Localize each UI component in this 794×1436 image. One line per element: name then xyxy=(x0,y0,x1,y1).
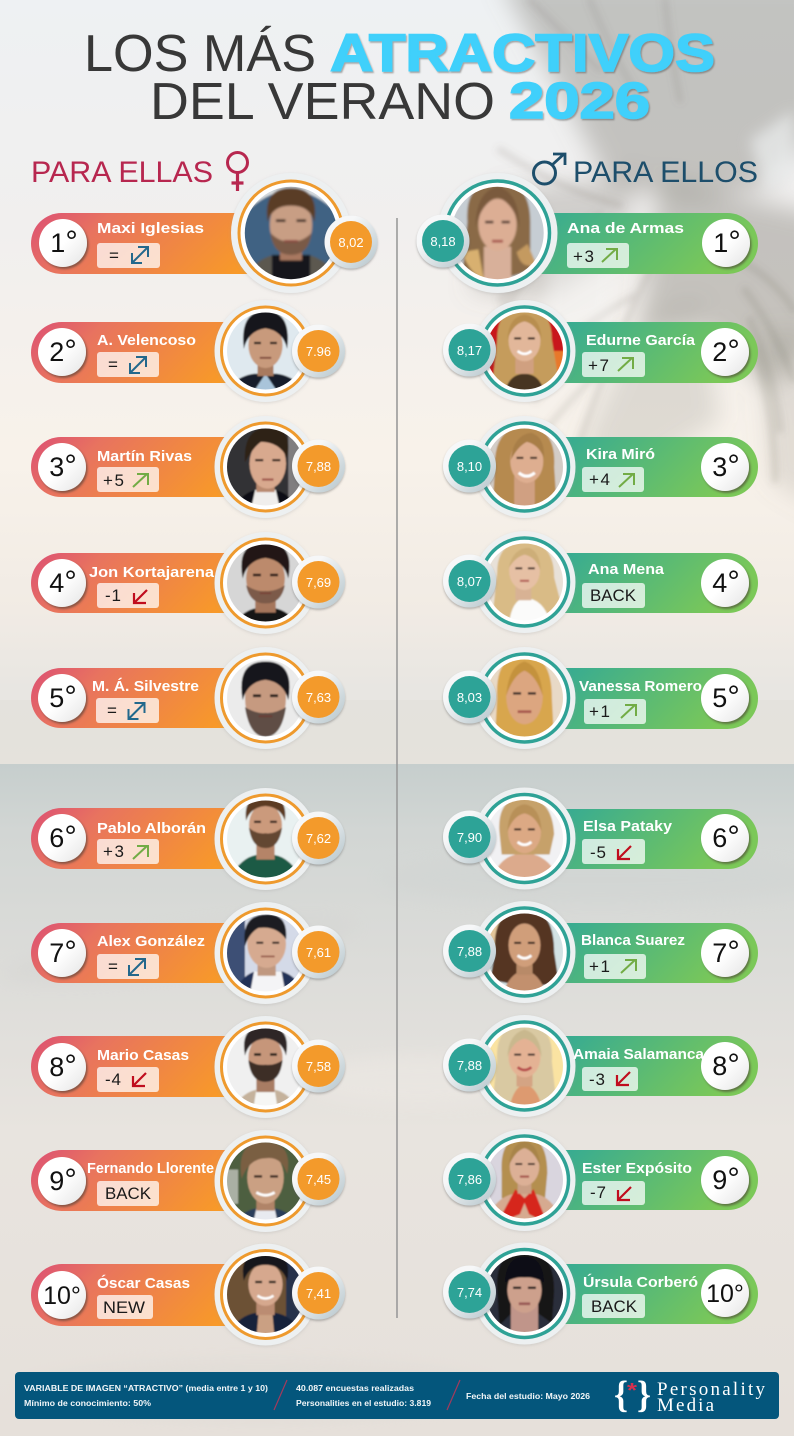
score: 7,88 xyxy=(457,944,482,959)
change badge xyxy=(97,1067,159,1092)
photo frame xyxy=(231,173,351,293)
photo frame xyxy=(214,300,316,402)
photo frame xyxy=(438,173,558,293)
change badge xyxy=(584,954,646,979)
bar xyxy=(31,808,261,869)
change badge xyxy=(97,583,159,608)
rank: 4° xyxy=(712,564,740,599)
ranking row: Blanca Suarez xyxy=(443,901,758,1003)
score xyxy=(443,924,496,978)
ranking row: Maxi Iglesias xyxy=(31,173,378,293)
photo frame xyxy=(214,532,316,634)
score: 7,90 xyxy=(457,830,482,845)
palm tree xyxy=(470,0,794,510)
score: 7,62 xyxy=(306,831,331,846)
bar xyxy=(31,322,261,383)
change badge: BACK xyxy=(590,586,637,605)
rank xyxy=(701,559,749,607)
bar xyxy=(31,1150,261,1211)
ranking row: Vanessa Romero xyxy=(443,647,758,749)
change badge: +5 xyxy=(103,471,124,490)
rank xyxy=(38,1271,86,1319)
photo: Elsa Pataky xyxy=(490,800,563,877)
rank xyxy=(701,1042,749,1090)
photo: Úrsula Corberó xyxy=(479,1248,570,1339)
change badge: -5 xyxy=(590,843,606,862)
ranking row: Amaia Salamanca xyxy=(443,1015,758,1117)
vertical divider xyxy=(396,218,398,1318)
name: Kira Miró xyxy=(586,446,655,463)
score xyxy=(443,324,496,376)
change badge: = xyxy=(107,701,117,720)
score: 8,17 xyxy=(457,343,482,358)
change badge xyxy=(582,1181,645,1205)
photo frame xyxy=(474,901,576,1003)
title xyxy=(84,24,715,131)
title: LOS MÁS xyxy=(84,25,316,83)
change badge: BACK xyxy=(105,1184,152,1203)
rank: 6° xyxy=(712,819,740,854)
change badge: = xyxy=(109,246,119,265)
name: Ana de Armas xyxy=(567,220,684,237)
ranking row: Mario Casas xyxy=(31,1016,345,1118)
rank: 1° xyxy=(50,224,78,259)
study date: Fecha del estudio: Mayo 2026 xyxy=(466,1392,591,1401)
bar xyxy=(31,213,286,274)
photo frame xyxy=(214,1016,316,1118)
rank: 2° xyxy=(49,333,77,368)
logo: Personality Media: { xyxy=(614,1374,628,1416)
ranking row: Edurne García xyxy=(443,300,758,402)
name: Amaia Salamanca xyxy=(573,1046,705,1063)
score xyxy=(292,926,345,978)
score xyxy=(292,812,345,864)
photo frame xyxy=(214,647,316,749)
bar xyxy=(530,1036,758,1096)
photo frame xyxy=(214,788,316,890)
name: Ana Mena xyxy=(588,561,665,578)
rank xyxy=(701,328,749,376)
photo frame xyxy=(474,1129,576,1231)
logo: Personality Media xyxy=(614,1374,766,1416)
name: Alex González xyxy=(97,933,205,950)
rank xyxy=(701,674,749,722)
bar xyxy=(530,1150,758,1210)
rank: 8° xyxy=(712,1047,740,1082)
photo frame xyxy=(474,788,576,890)
photo: Edurne García xyxy=(490,312,563,390)
score: 8,07 xyxy=(457,574,482,589)
photo: Ana Mena xyxy=(490,544,563,618)
change badge: +3 xyxy=(573,247,594,266)
bar xyxy=(500,213,758,274)
score: 7,58 xyxy=(306,1059,331,1074)
rank xyxy=(38,559,86,607)
change badge xyxy=(567,243,629,268)
change badge xyxy=(97,352,159,377)
score xyxy=(416,214,470,268)
rank xyxy=(38,443,86,491)
name: Vanessa Romero xyxy=(579,678,702,695)
photo: Jon Kortajarena xyxy=(227,544,300,622)
bar xyxy=(530,553,758,613)
rank: 6° xyxy=(49,819,77,854)
change badge xyxy=(584,699,646,724)
photo frame xyxy=(214,416,316,518)
score: 7.96 xyxy=(306,344,331,359)
score: 7,61 xyxy=(306,945,331,960)
score: 7,45 xyxy=(306,1172,331,1187)
rank xyxy=(39,219,87,267)
bar xyxy=(530,322,758,383)
change badge: -3 xyxy=(589,1070,605,1089)
change badge: +3 xyxy=(103,842,124,861)
ranking row: Óscar Casas xyxy=(31,1244,345,1346)
photo: Pablo Alborán xyxy=(227,800,300,878)
rank xyxy=(38,929,86,977)
change badge: -4 xyxy=(105,1070,121,1089)
score: 7,41 xyxy=(306,1286,331,1301)
change badge: NEW xyxy=(103,1298,145,1317)
photo: Fernando Llorente xyxy=(227,1142,300,1220)
title: 2026 xyxy=(509,72,650,129)
ranking row: A. Velencoso xyxy=(31,300,345,402)
rank xyxy=(702,219,750,267)
rank xyxy=(38,674,86,722)
change badge xyxy=(582,1067,638,1091)
rank: 10° xyxy=(43,1282,81,1310)
title: DEL VERANO xyxy=(150,73,495,131)
photo: Martín Rivas xyxy=(227,428,300,506)
rank: 5° xyxy=(712,679,740,714)
photo frame xyxy=(474,300,576,402)
score xyxy=(443,440,496,492)
name: Mario Casas xyxy=(97,1047,189,1064)
ranking row: Martín Rivas xyxy=(31,416,345,518)
survey figures: Personalities en el estudio: 3.819 xyxy=(296,1399,432,1408)
ranking row: M. Á. Silvestre xyxy=(31,647,345,749)
score xyxy=(443,1038,496,1092)
score xyxy=(443,810,496,864)
name: Blanca Suarez xyxy=(581,932,685,949)
score xyxy=(324,216,378,268)
name: Fernando Llorente xyxy=(87,1160,214,1177)
rank: 3° xyxy=(712,448,740,483)
name: Úrsula Corberó xyxy=(583,1273,698,1291)
heading: para ellas: PARA ELLAS xyxy=(31,156,213,189)
score: 7,88 xyxy=(306,459,331,474)
change badge: = xyxy=(108,355,118,374)
rank xyxy=(701,443,749,491)
score: 7,69 xyxy=(306,575,331,590)
bar xyxy=(31,668,261,728)
bar xyxy=(31,553,261,613)
footer panel xyxy=(15,1372,779,1419)
name: Maxi Iglesias xyxy=(97,220,204,237)
score xyxy=(292,1152,345,1206)
score: 8,03 xyxy=(457,690,482,705)
score xyxy=(443,670,496,724)
ranking row: Úrsula Corberó xyxy=(443,1242,758,1344)
name: Edurne García xyxy=(586,332,696,349)
name: A. Velencoso xyxy=(97,332,196,349)
change badge xyxy=(582,352,645,377)
ranking row: Ester Expósito xyxy=(443,1129,758,1231)
bar xyxy=(31,1264,261,1326)
ranking row: Kira Miró xyxy=(443,416,758,518)
rank: 2° xyxy=(712,333,740,368)
logo: Personality Media: Personality xyxy=(657,1379,766,1400)
rank xyxy=(38,1157,86,1205)
change badge: +1 xyxy=(589,957,610,976)
rank xyxy=(38,814,86,862)
rank: 7° xyxy=(49,934,77,969)
photo: Ester Expósito xyxy=(479,1134,570,1226)
photo: Maxi Iglesias xyxy=(244,186,336,280)
score xyxy=(292,324,345,378)
photo frame xyxy=(214,1244,316,1346)
ranking row: Fernando Llorente xyxy=(31,1130,345,1232)
rank: 10° xyxy=(706,1280,744,1308)
rank: 1° xyxy=(713,224,741,259)
photo frame xyxy=(474,1242,576,1344)
name: Elsa Pataky xyxy=(583,818,673,835)
ranking row: Ana Mena xyxy=(443,531,758,633)
change badge xyxy=(97,839,159,864)
photo frame xyxy=(214,1130,316,1232)
photo: M. A. Silvestre xyxy=(227,660,300,736)
change badge xyxy=(97,243,160,268)
ranking row: Ana de Armas xyxy=(416,173,758,293)
photo: Blanca Suarez xyxy=(490,914,563,990)
rank: 7° xyxy=(712,934,740,969)
score xyxy=(443,1266,496,1318)
photo frame xyxy=(474,531,576,633)
photo: Mario Casas xyxy=(227,1028,300,1106)
change badge: BACK xyxy=(591,1297,638,1316)
heading: para ellos: PARA ELLOS xyxy=(573,156,758,189)
bar xyxy=(530,809,758,869)
rank: 3° xyxy=(49,448,77,483)
photo: Amaia Salamanca xyxy=(490,1028,563,1104)
change badge xyxy=(582,839,645,864)
score xyxy=(292,670,345,724)
rank: 4° xyxy=(49,564,77,599)
change badge: -7 xyxy=(590,1183,606,1202)
bar xyxy=(530,437,758,497)
rank: 9° xyxy=(712,1161,740,1196)
score: 7,63 xyxy=(306,690,331,705)
logo: Personality Media: Media xyxy=(657,1395,715,1416)
bar xyxy=(31,923,261,983)
score: 7,86 xyxy=(457,1172,482,1187)
rank xyxy=(701,929,749,977)
score xyxy=(292,440,345,492)
change badge: -1 xyxy=(105,586,121,605)
bar xyxy=(31,1036,261,1097)
change badge: +7 xyxy=(588,356,609,375)
name: Óscar Casas xyxy=(97,1274,190,1292)
change badge xyxy=(97,1295,153,1319)
score: 8,10 xyxy=(457,459,482,474)
change badge: +4 xyxy=(589,470,610,489)
study variable note: Mínimo de conocimiento: 50% xyxy=(24,1399,151,1408)
rank xyxy=(701,1156,749,1204)
change badge: +1 xyxy=(589,702,610,721)
score: 8,02 xyxy=(338,235,364,250)
change badge xyxy=(97,954,159,979)
photo frame xyxy=(474,647,576,749)
survey figures: 40.087 encuestas realizadas xyxy=(296,1384,415,1393)
change badge xyxy=(582,467,644,492)
title: ATRACTIVOS xyxy=(330,24,715,83)
ranking row: Elsa Pataky xyxy=(443,788,758,890)
photo: Vanessa Romero xyxy=(490,660,563,736)
change badge: = xyxy=(108,957,118,976)
change badge xyxy=(582,1294,645,1318)
name: Jon Kortajarena xyxy=(89,564,215,581)
photo: Alex González xyxy=(227,914,300,992)
study variable note: VARIABLE DE IMAGEN “ATRACTIVO” (media entre 1 y 10) xyxy=(24,1384,268,1393)
photo frame xyxy=(474,1015,576,1117)
rank xyxy=(701,814,749,862)
bar xyxy=(530,668,758,729)
photo: A. Velencoso xyxy=(227,312,300,390)
change badge xyxy=(97,467,159,492)
score xyxy=(292,1040,345,1092)
rank xyxy=(38,1043,86,1091)
score: 7,88 xyxy=(457,1058,482,1073)
bar xyxy=(530,1264,758,1324)
rank xyxy=(701,1269,749,1317)
photo: Óscar Casas xyxy=(227,1256,300,1333)
rank: 8° xyxy=(49,1048,77,1083)
score: 7,74 xyxy=(457,1285,482,1300)
photo: Kira Miró xyxy=(490,428,563,506)
logo: Personality Media: * xyxy=(627,1380,637,1402)
logo: Personality Media: } xyxy=(637,1374,651,1416)
bar xyxy=(31,437,261,497)
score xyxy=(443,1152,496,1206)
score xyxy=(292,556,345,608)
name: Ester Expósito xyxy=(582,1160,692,1177)
photo frame xyxy=(474,416,576,518)
study variable note xyxy=(24,1384,268,1408)
ranking row: Alex González xyxy=(31,902,345,1004)
change badge xyxy=(96,698,159,723)
score xyxy=(443,554,496,608)
ranking row: Pablo Alborán xyxy=(31,788,345,890)
rank: 9° xyxy=(49,1162,77,1197)
rank xyxy=(38,328,86,376)
photo frame xyxy=(214,902,316,1004)
name: M. Á. Silvestre xyxy=(92,678,199,695)
change badge xyxy=(97,1181,159,1206)
photo: Ana de Armas xyxy=(454,186,544,280)
score: 8,18 xyxy=(430,234,456,249)
rank: 5° xyxy=(49,679,77,714)
score xyxy=(292,1266,345,1320)
ranking row: Jon Kortajarena xyxy=(31,532,345,634)
name: Martín Rivas xyxy=(97,448,192,465)
change badge xyxy=(582,583,645,608)
name: Pablo Alborán xyxy=(97,820,206,837)
survey figures xyxy=(296,1384,432,1408)
bar xyxy=(530,923,758,983)
